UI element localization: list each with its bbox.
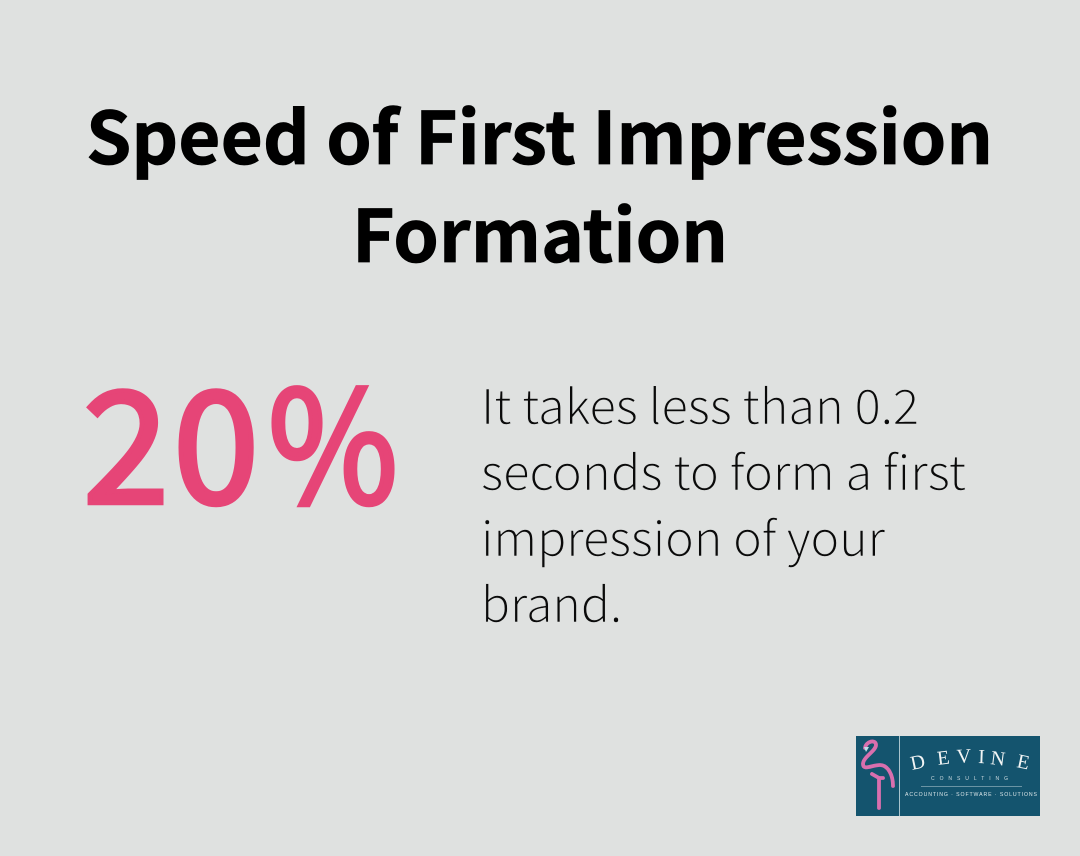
logo subtitle: CONSULTING [931, 776, 1008, 782]
logo tagline: ACCOUNTING · SOFTWARE · SOLUTIONS [905, 792, 1038, 798]
description text: impression of your [481, 500, 886, 570]
logo wordmark: V [956, 745, 972, 768]
logo: Devine Consulting [856, 736, 1040, 816]
description text [481, 368, 966, 636]
logo wordmark: D [908, 750, 927, 775]
description text: It takes less than 0.2 [481, 368, 919, 438]
logo wordmark: N [989, 747, 1006, 771]
logo wordmark: I [978, 746, 985, 768]
title: Formation [352, 178, 728, 283]
logo wordmark [908, 745, 1031, 775]
description text: seconds to form a first [481, 434, 966, 504]
big stat: 20%: % [268, 323, 398, 548]
icon: flamingo [863, 741, 893, 808]
description text: brand. [481, 566, 622, 636]
title: Speed of First Impression [86, 80, 993, 185]
logo divider [899, 736, 900, 816]
big stat: 20%: 0 [173, 323, 259, 548]
big stat: 20%: 2 [83, 323, 169, 548]
big stat: 20% [83, 323, 398, 548]
logo wordmark: E [1015, 750, 1031, 774]
logo wordmark: E [936, 747, 951, 770]
title [86, 80, 993, 283]
